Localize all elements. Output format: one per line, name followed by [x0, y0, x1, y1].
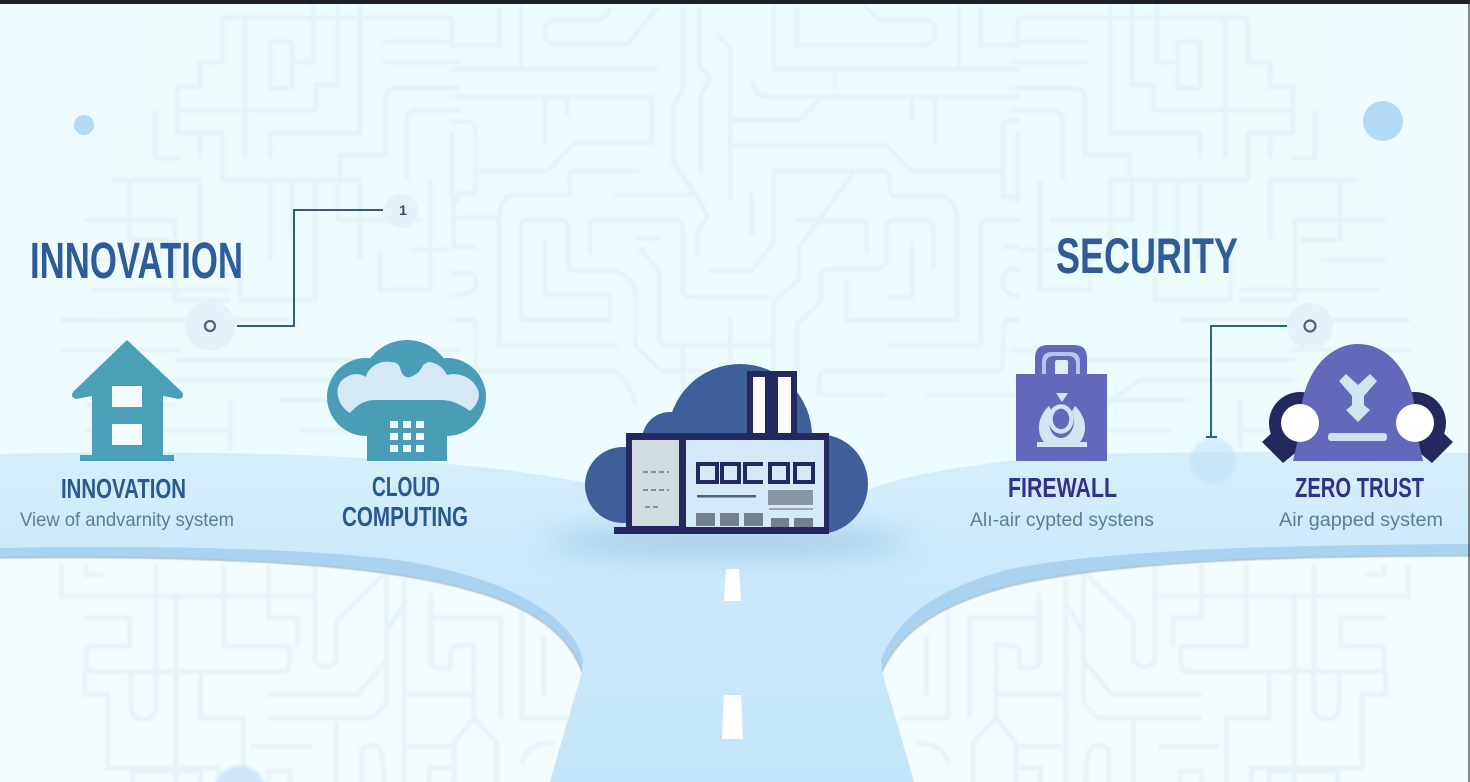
connector: security [1206, 303, 1333, 437]
icon: cloud computing phone [327, 340, 486, 461]
icon: central cloud data centre [585, 364, 868, 534]
label: firewall: Alı-air cypted systens [970, 510, 1154, 531]
icon: zero trust shield [1262, 344, 1453, 463]
road shadow under the building [543, 528, 913, 556]
faint gear marker at the bottom edge [214, 766, 266, 782]
label: zero trust: Air gapped system [1279, 510, 1443, 531]
label: zero trust: ZERO TRUST [1295, 472, 1424, 503]
decorative dot: top left [74, 115, 94, 135]
label: cloud computing: COMPUTING [342, 501, 468, 532]
decorative dot: top right [1363, 101, 1403, 141]
road dash: upper [724, 569, 741, 601]
label: cloud computing: CLOUD [372, 471, 440, 502]
label: innovation: INNOVATION [61, 473, 186, 504]
label: firewall: FIREWALL [1008, 472, 1117, 503]
road: T-junction with highway markings [0, 452, 1470, 782]
heading: security: SECURITY [1056, 228, 1238, 284]
connector: innovation [185, 194, 418, 351]
label: zero trust [1279, 472, 1443, 531]
icon: house [72, 340, 183, 461]
label: innovation: View of andvarnity system [20, 510, 234, 531]
road dash: lower [722, 695, 743, 739]
connector: innovation: 1 [399, 202, 407, 218]
label: cloud computing [342, 471, 468, 532]
faint gear marker on the road [1190, 438, 1236, 484]
heading: innovation: INNOVATION [30, 232, 243, 289]
label: innovation [20, 473, 234, 531]
label: firewall [970, 472, 1154, 531]
icon: firewall bag [1016, 345, 1107, 461]
